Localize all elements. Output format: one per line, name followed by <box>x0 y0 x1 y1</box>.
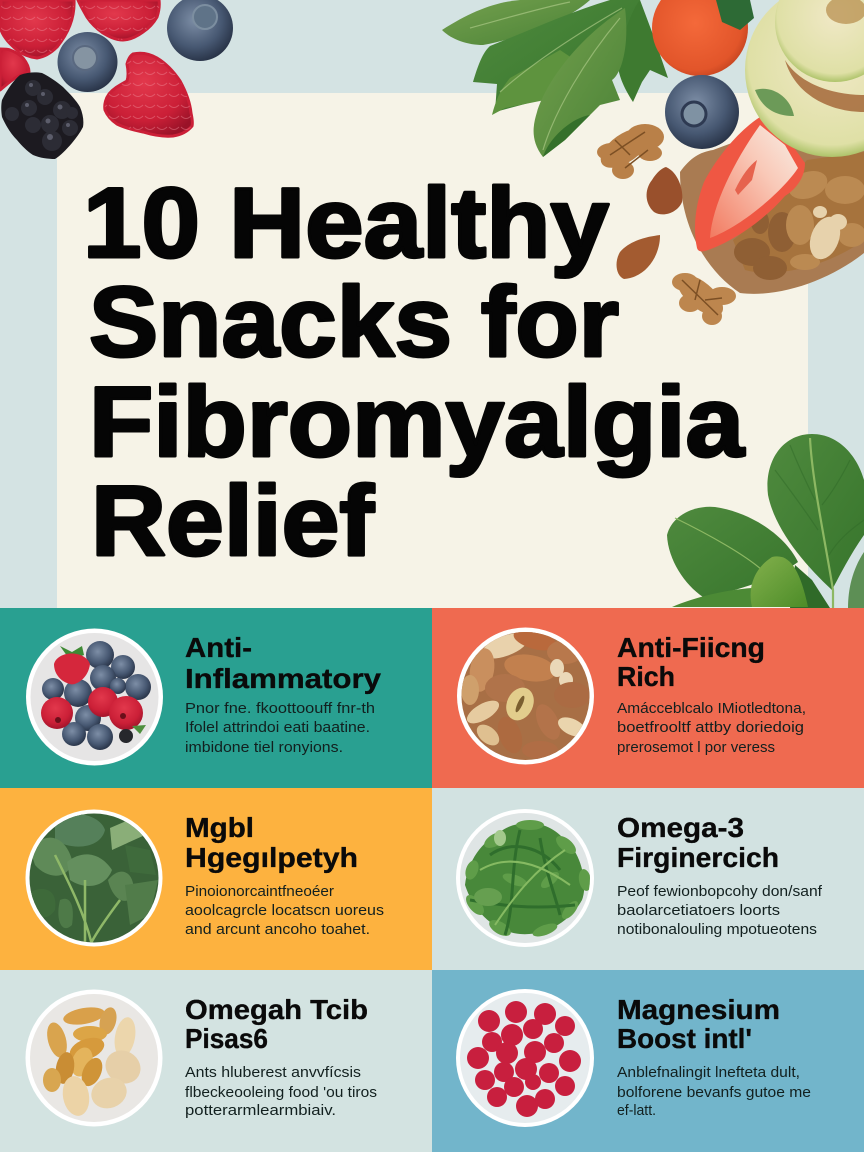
body text: Peof fewionbopcohy don/sanf <box>617 884 823 900</box>
title: Snacks for <box>89 266 619 377</box>
heading: Pisas6 <box>185 1023 268 1054</box>
heading: Magnesium <box>617 994 780 1025</box>
panel: magnesium boost <box>432 970 864 1152</box>
heading <box>617 632 765 692</box>
cream title panel <box>57 93 808 608</box>
heading: Firginercich <box>617 842 779 873</box>
illustration: fruit and nut bowl <box>652 0 864 294</box>
body text: baolarcetiatoers loorts <box>617 903 780 919</box>
body text: Amácceblcalo IMiotledtona, <box>617 701 806 717</box>
body text <box>617 701 806 756</box>
icon: cashew plate <box>26 990 162 1126</box>
panel: fiber rich nuts <box>432 608 864 788</box>
illustration: walnuts and almonds <box>594 120 736 325</box>
body text <box>617 1065 811 1119</box>
body text <box>185 1065 377 1119</box>
heading: Hgegılpetyh <box>185 842 358 873</box>
heading: Omegah Tcib <box>185 994 368 1025</box>
heading <box>185 812 358 873</box>
heading: Anti-Fiicng <box>617 632 765 663</box>
body text: aoolcagrcle locatscn uoreus <box>185 903 384 919</box>
body text <box>617 884 823 938</box>
body text: boetfrooltf attby doriedoig <box>617 720 804 736</box>
body text: Anblefnalingit lnefteta dult, <box>617 1065 800 1081</box>
body text: potterarmlearmbiaiv. <box>185 1103 336 1119</box>
heading: Mgbl <box>185 812 254 843</box>
illustration: spinach leaves bottom right <box>667 434 864 608</box>
body text: ef-latt. <box>617 1103 656 1119</box>
heading: Rich <box>617 661 675 692</box>
title <box>83 167 745 576</box>
body text: Ants hluberest anvvfícsis <box>185 1065 361 1081</box>
heading: Boost intl' <box>617 1023 752 1054</box>
title: 10 Healthy <box>83 167 609 278</box>
icon: arugula plate <box>456 809 594 947</box>
panel: omega-3 greens <box>456 809 822 947</box>
heading: Anti- <box>185 632 252 663</box>
title: Relief <box>91 465 375 576</box>
panel: magnesium greens <box>0 788 432 970</box>
panel: snack mix <box>26 990 376 1126</box>
body text <box>185 884 384 938</box>
body text: prerosemot l por veress <box>617 740 775 756</box>
body text: and arcunt ancoho toahet. <box>185 922 370 938</box>
illustration: berries top left <box>0 0 233 159</box>
body text: notibonalouling mpotueotens <box>617 922 817 938</box>
body text <box>185 701 375 756</box>
heading <box>617 994 780 1054</box>
body text: imbidone tiel ronyions. <box>185 740 343 756</box>
icon: spinach plate <box>26 810 162 946</box>
panel: anti-inflammatory <box>0 608 432 788</box>
body text: bolforene bevanfs gutoe me <box>617 1085 811 1101</box>
icon: mixed nuts plate <box>457 626 594 764</box>
body text: flbeckeooleing food 'ou tiros <box>185 1085 377 1101</box>
illustration: leaves top right <box>442 0 668 157</box>
body text: Ifolel attrindoi eati baatine. <box>185 720 370 736</box>
icon: red berries plate <box>456 989 594 1127</box>
heading: Inflammatory <box>185 663 382 694</box>
body text: Pnor fne. fkoottoouff fnr-th <box>185 701 375 717</box>
heading <box>617 812 779 873</box>
heading <box>185 994 368 1054</box>
icon: mixed berries plate <box>26 628 163 766</box>
title: Fibromyalgia <box>89 366 745 477</box>
body text: Pinoionorcaintfneoéer <box>185 884 334 900</box>
heading: Omega-3 <box>617 812 744 843</box>
heading <box>185 632 382 694</box>
